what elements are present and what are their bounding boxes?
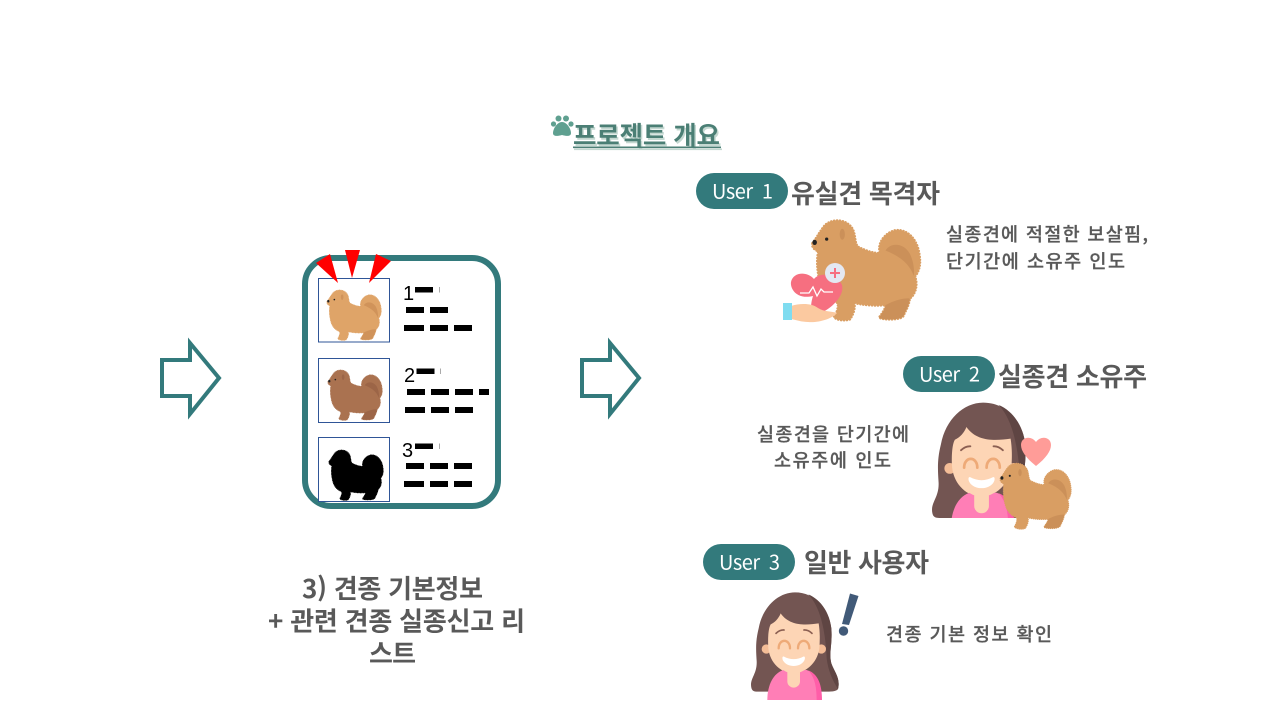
icon: smiling user with exclamation mark [751, 592, 858, 700]
badge: user 1: User 1 [712, 176, 773, 204]
list row 3 [318, 438, 472, 502]
list row 2: 2 [404, 365, 415, 387]
text: user 2 description: 소유주에 인도 [774, 447, 891, 473]
icon: dog with heart and care hand [783, 220, 920, 322]
arrow: middle [582, 343, 639, 414]
list row 2 [318, 358, 489, 422]
title text: 프로젝트 개요 [573, 116, 720, 152]
list row 1 [318, 278, 472, 342]
caption: breed info and report list: 스트 [369, 634, 416, 671]
heading: user 1: 유실견 목격자 [791, 174, 940, 211]
badge: user 2: User 2 [919, 358, 980, 388]
title text: 프로젝트 개요 [574, 118, 722, 154]
icon: paw print [551, 116, 574, 136]
text: user 1 description: 단기간에 소유주 인도 [946, 248, 1125, 274]
heading: user 3: 일반 사용자 [804, 543, 929, 580]
text: user 1 description: 실종견에 적절한 보살핌, [946, 221, 1148, 247]
caption: breed info and report list: 3) 견종 기본정보 [302, 569, 483, 606]
caption: breed info and report list: + 관련 견종 실종신고 리 [268, 602, 525, 638]
text: user 3 description: 견종 기본 정보 확인 [886, 621, 1052, 647]
heading: user 2: 실종견 소유주 [998, 357, 1147, 394]
icon: owner hugging dog [932, 403, 1071, 529]
title [551, 116, 722, 154]
text: user 2 description [757, 421, 909, 473]
text: user 1 description [946, 221, 1148, 274]
panel: breed list card [305, 250, 498, 506]
list row 3: 3 [402, 440, 413, 462]
badge: user 2 [903, 356, 995, 392]
badge: user 3: User 3 [719, 546, 780, 576]
panel: user 1 [696, 173, 1148, 322]
arrow: left [162, 343, 219, 414]
panel: user 2 [757, 356, 1147, 529]
badge: user 1 [696, 173, 788, 209]
panel: user 3 [703, 543, 1052, 700]
text: user 2 description: 실종견을 단기간에 [757, 421, 909, 447]
list row 1: 1 [403, 283, 414, 305]
badge: user 3 [703, 544, 795, 580]
icon: red alert marks [316, 250, 391, 283]
caption: breed info and report list [268, 569, 525, 671]
